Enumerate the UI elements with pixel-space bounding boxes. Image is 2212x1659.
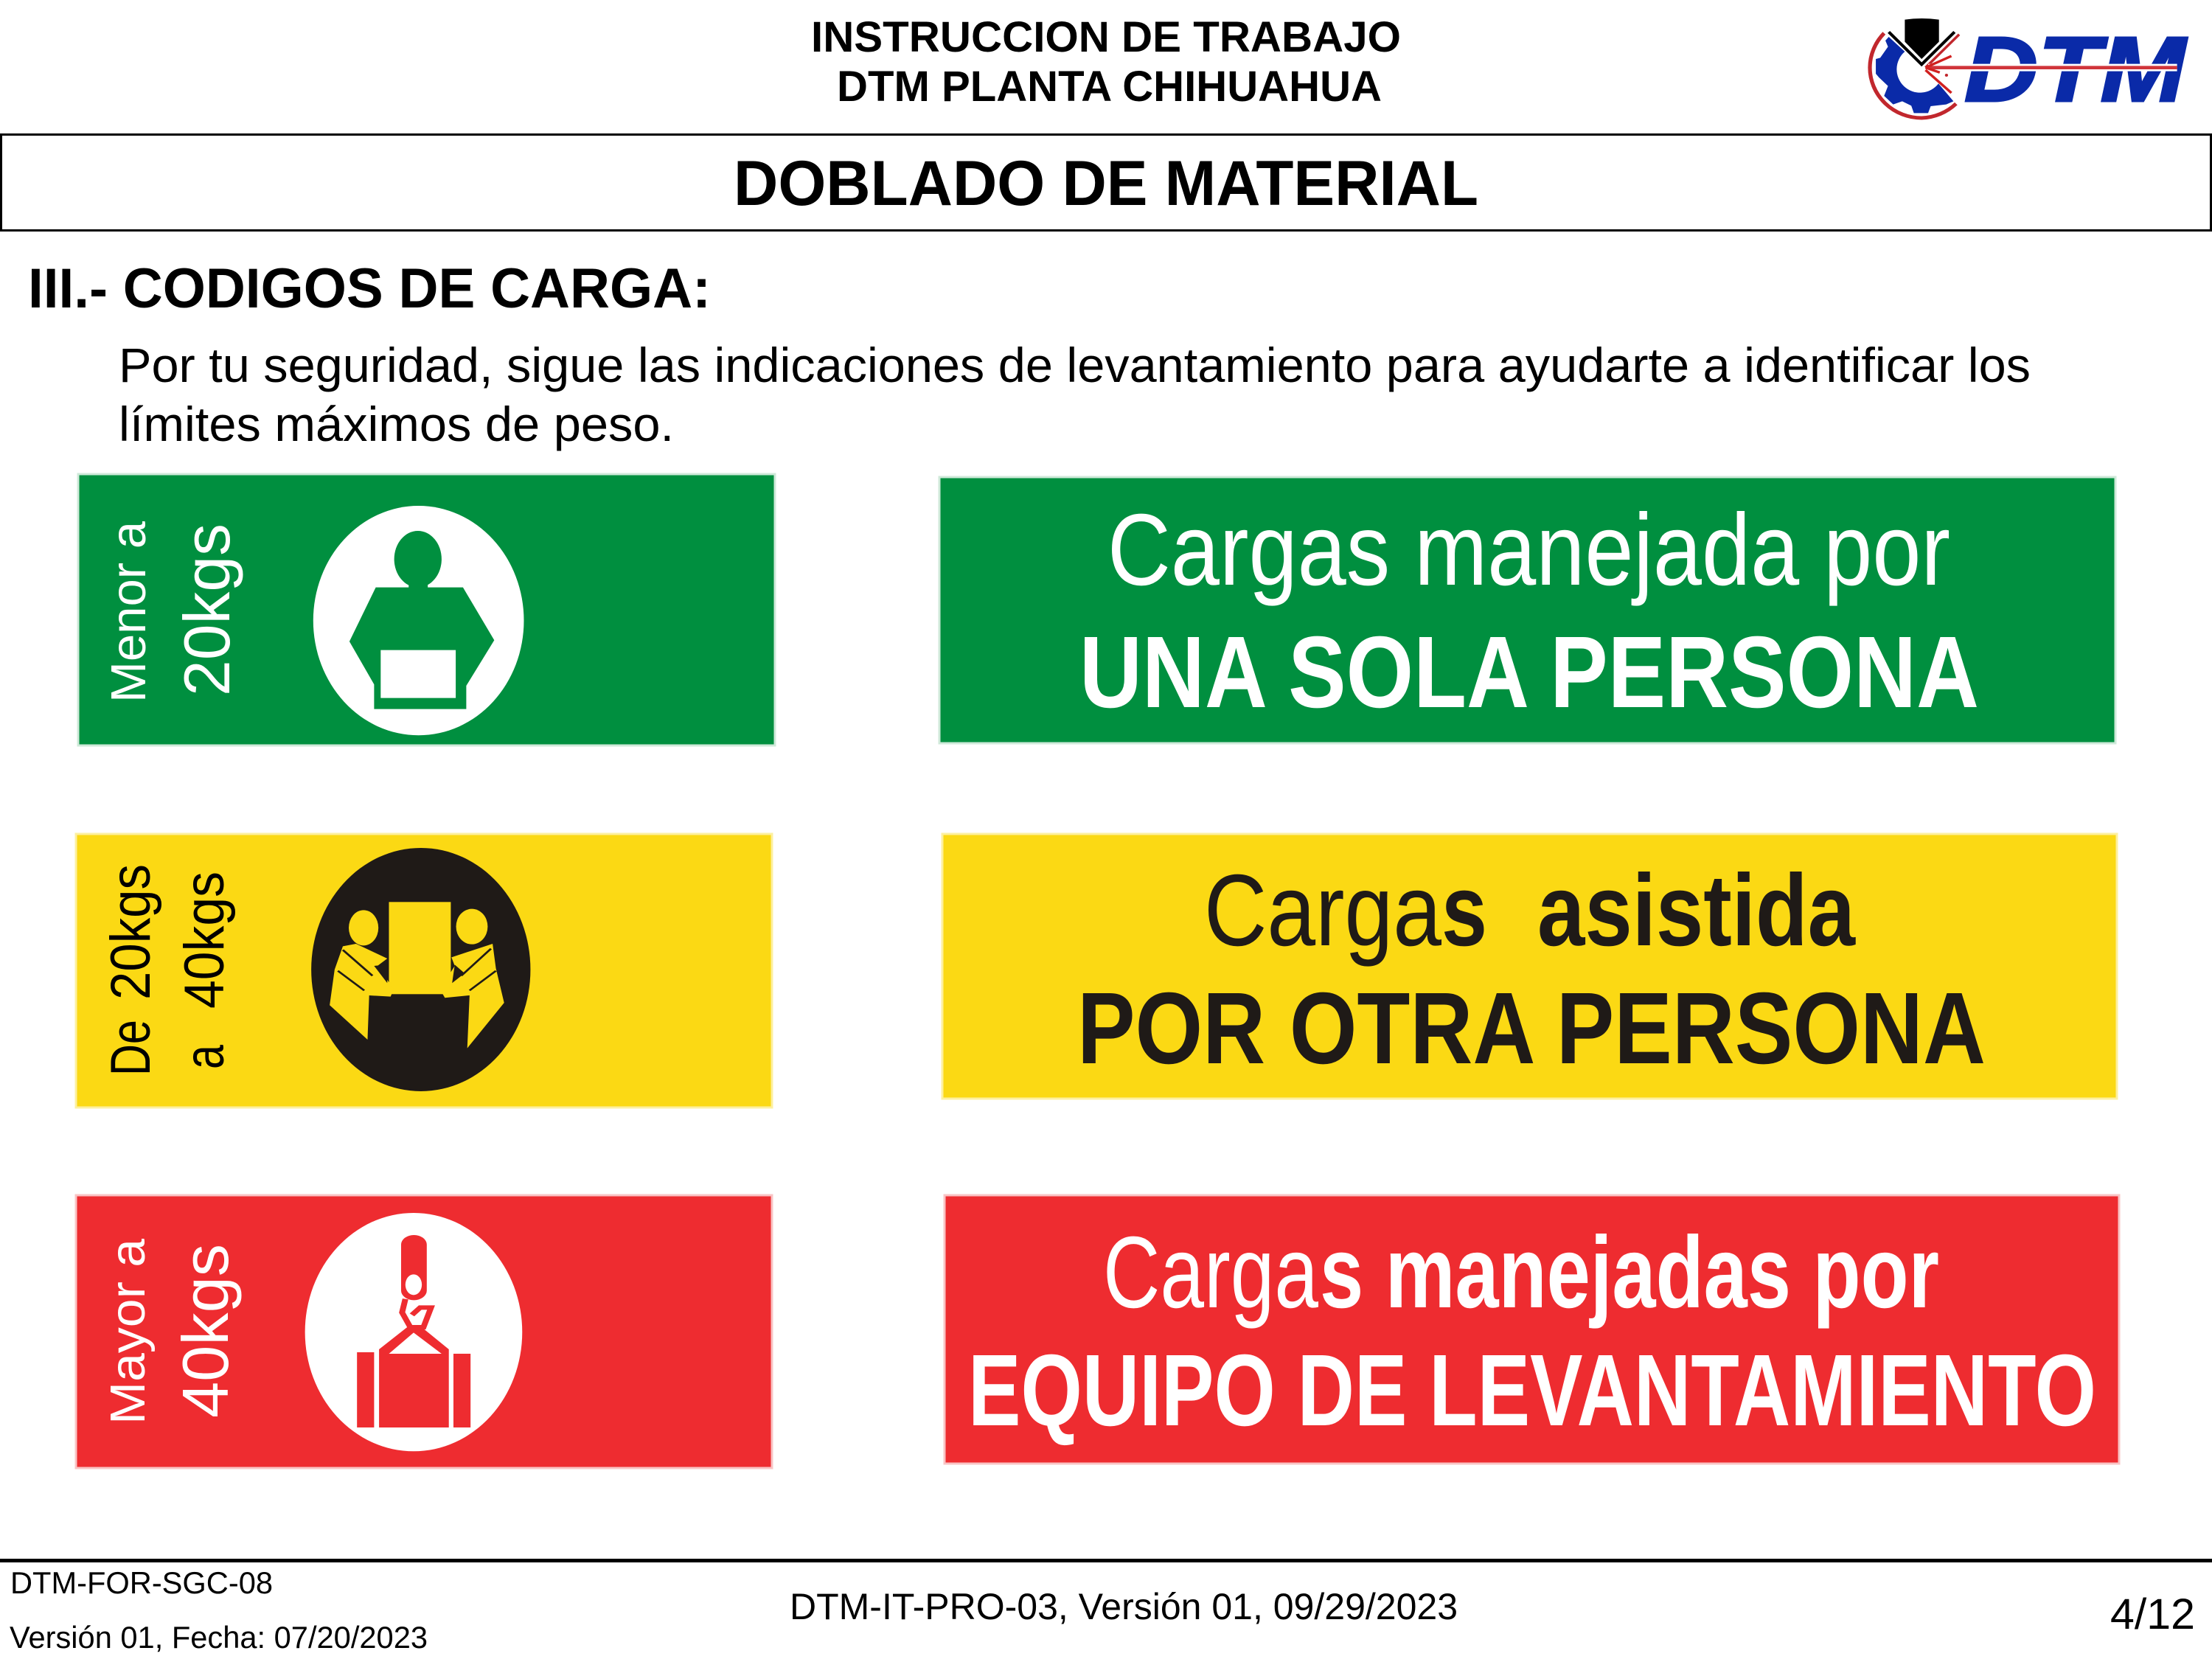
panel: green description: UNA SOLA PERSONA xyxy=(1079,616,1979,729)
footer: Versión 01, Fecha: 07/20/2023 xyxy=(10,1620,428,1655)
footer: DTM-IT-PRO-03, Versión 01, 09/29/2023 xyxy=(790,1586,1458,1627)
panel: yellow weight sign: De xyxy=(100,1020,162,1076)
footer: 4/12 xyxy=(2110,1590,2195,1638)
footer: DTM-FOR-SGC-08 xyxy=(10,1565,273,1600)
panel: yellow description: POR OTRA PERSONA xyxy=(1077,972,1986,1085)
logo: DTM xyxy=(1870,18,2188,121)
icon: two people carrying box xyxy=(311,848,530,1091)
title box xyxy=(1,134,2211,230)
panel: green description: Cargas manejada por xyxy=(1107,493,1950,607)
icon: one person carrying box xyxy=(313,506,524,735)
panel: yellow description: s xyxy=(1441,854,1487,967)
panel: green weight sign: Menor a xyxy=(101,521,156,703)
intro paragraph: Por tu seguridad, sigue las indicaciones de levantamiento para ayudarte a identificar los xyxy=(119,338,2031,392)
panel: yellow weight sign: 20kgs xyxy=(100,864,162,1000)
footer xyxy=(0,1559,2212,1655)
panel: yellow weight sign: a xyxy=(173,1044,236,1069)
panel: yellow description: Carga xyxy=(1204,854,1441,967)
intro paragraph xyxy=(119,338,2031,451)
section heading: III.- CODIGOS DE CARGA: xyxy=(28,257,711,320)
intro paragraph: límites máximos de peso. xyxy=(119,397,674,451)
panel: red weight sign xyxy=(76,1195,772,1468)
panel: red description: s manejadas por xyxy=(1320,1216,1939,1329)
header title: INSTRUCCION DE TRABAJO xyxy=(811,13,1401,61)
logo: DTM: DTM xyxy=(1964,18,2188,121)
panel: yellow description: asistida xyxy=(1537,854,1856,967)
panel: red weight sign: Mayor a xyxy=(100,1238,156,1425)
panel: green weight sign: 20kgs xyxy=(170,524,243,696)
panel: red weight sign: 40kgs xyxy=(169,1244,242,1418)
panel: yellow weight sign xyxy=(76,834,772,1107)
header title: DTM PLANTA CHIHUAHUA xyxy=(837,63,1382,111)
panel: yellow weight sign: 40kgs xyxy=(173,872,236,1009)
icon: load on lifting hook xyxy=(305,1213,522,1451)
panel: green description xyxy=(939,477,2115,743)
panel: green weight sign xyxy=(78,474,775,745)
title box: DOBLADO DE MATERIAL xyxy=(734,148,1478,219)
panel: yellow description xyxy=(942,834,2117,1099)
panel: red description: Carga xyxy=(1103,1216,1318,1329)
header title xyxy=(811,13,1401,111)
panel: red description xyxy=(945,1195,2119,1464)
